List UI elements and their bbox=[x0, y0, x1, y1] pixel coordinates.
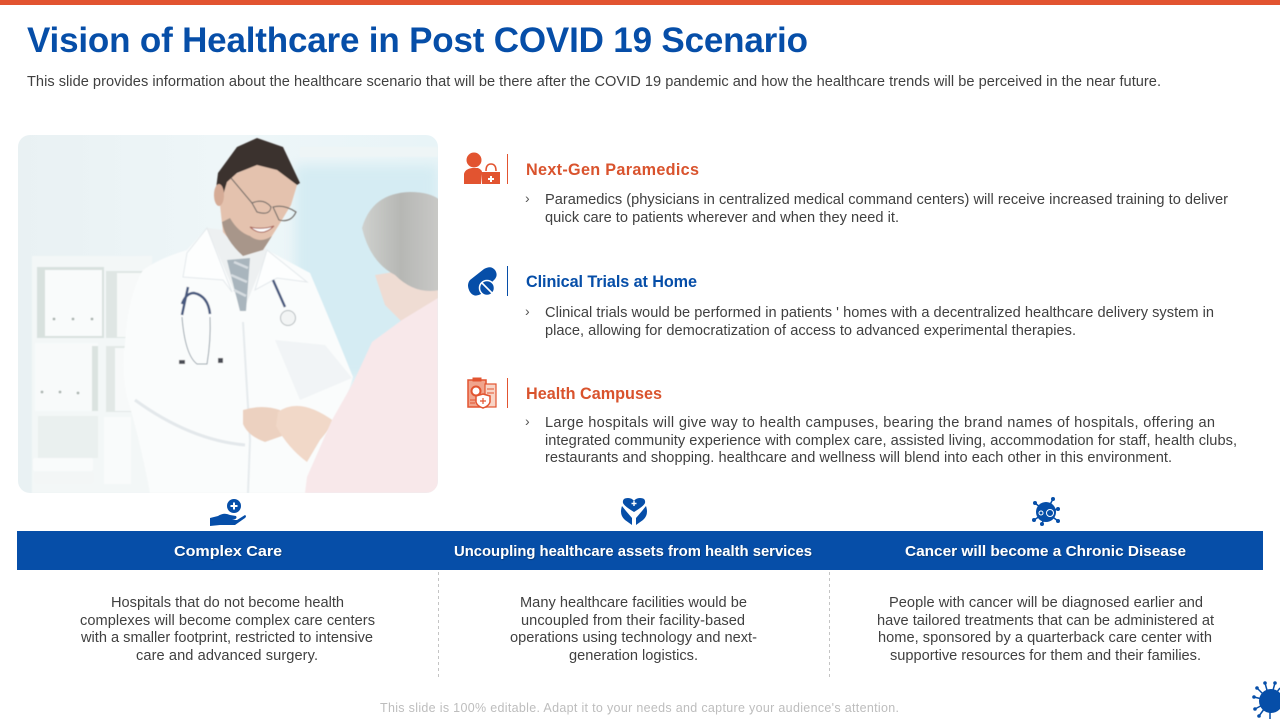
column 1 text: complexes will become complex care centers bbox=[80, 613, 375, 629]
section: Next-Gen Paramedics bbox=[464, 152, 1228, 226]
bullet text: › bbox=[525, 413, 530, 429]
icon: paramedic with medical kit bbox=[464, 152, 500, 184]
bullet text bbox=[525, 190, 1228, 226]
band heading: Cancer chronic disease: Cancer will become a Chronic Disease bbox=[905, 544, 1186, 560]
heading: Health Campuses bbox=[526, 385, 662, 403]
icon: virus cell bbox=[1032, 497, 1060, 526]
bullet text: integrated community experience with complex care, assisted living, accommodation for staff, health clubs, bbox=[545, 433, 1237, 449]
icon: hand holding medical plus bbox=[210, 499, 246, 526]
heading: Clinical Trials at Home bbox=[526, 273, 697, 291]
bullet text: place, allowing for democratization of access to advanced experimental therapies. bbox=[545, 323, 1076, 339]
top accent bar bbox=[0, 0, 1280, 5]
column 1 text: Hospitals that do not become health bbox=[111, 595, 344, 611]
column 2 text: Many healthcare facilities would be bbox=[520, 595, 747, 611]
heading: Next-Gen Paramedics bbox=[526, 161, 699, 179]
bullet text: › bbox=[525, 303, 530, 319]
subtitle: This slide provides information about the healthcare scenario that will be there after the COVID 19 pandemic and how the healthcare trends will be perceived in the near future. bbox=[27, 74, 1161, 90]
bullet text: restaurants and shopping. healthcare and wellness will blend into each other in this environment. bbox=[545, 450, 1172, 466]
band heading: Uncoupling healthcare assets: Uncoupling healthcare assets from health services bbox=[454, 544, 812, 560]
section: Clinical Trials at Home bbox=[468, 266, 1214, 339]
section: Health Campuses bbox=[468, 378, 1237, 466]
column 3 text: have tailored treatments that can be administered at bbox=[877, 613, 1214, 629]
divider bbox=[507, 154, 508, 184]
column 3 text: supportive resources for them and their families. bbox=[890, 648, 1201, 664]
column 3 text bbox=[877, 595, 1214, 664]
photo: doctor holding patient's hands bbox=[18, 135, 440, 493]
column 1 text: with a smaller footprint, restricted to intensive bbox=[80, 630, 373, 646]
bullet text: Clinical trials would be performed in patients ' homes with a decentralized healthcare delivery system in bbox=[545, 305, 1214, 321]
footer note: This slide is 100% editable. Adapt it to your needs and capture your audience's attention. bbox=[380, 701, 899, 715]
divider bbox=[507, 266, 508, 296]
icon: medical clipboard with shield bbox=[468, 378, 496, 408]
bullet text: Large hospitals will give way to health campuses, bearing the brand names of hospitals, offering an bbox=[545, 415, 1215, 431]
blue header band bbox=[17, 531, 1263, 570]
column 2 text bbox=[510, 595, 757, 664]
column 2 text: generation logistics. bbox=[569, 648, 698, 664]
bullet text bbox=[525, 303, 1214, 339]
column 1 text: care and advanced surgery. bbox=[136, 648, 318, 664]
column 2 text: uncoupled from their facility-based bbox=[521, 613, 745, 629]
bullet text: Paramedics (physicians in centralized medical command centers) will receive increased training to deliver bbox=[545, 192, 1228, 208]
column 1 text bbox=[80, 595, 375, 664]
bullet text: › bbox=[525, 190, 530, 206]
bullet text: quick care to patients wherever and when they need it. bbox=[545, 210, 899, 226]
icon: corner virus bbox=[1252, 681, 1280, 719]
icon: pills bbox=[468, 267, 497, 296]
icon: hands holding heart bbox=[621, 498, 647, 525]
divider bbox=[507, 378, 508, 408]
title: Vision of Healthcare in Post COVID 19 Scenario bbox=[27, 21, 808, 60]
column 3 text: home, sponsored by a quarterback care center with bbox=[878, 630, 1212, 646]
column 2 text: operations using technology and next- bbox=[510, 630, 757, 646]
column 3 text: People with cancer will be diagnosed earlier and bbox=[889, 595, 1203, 611]
band heading: Complex Care: Complex Care bbox=[174, 544, 282, 560]
bullet text bbox=[525, 413, 1237, 466]
